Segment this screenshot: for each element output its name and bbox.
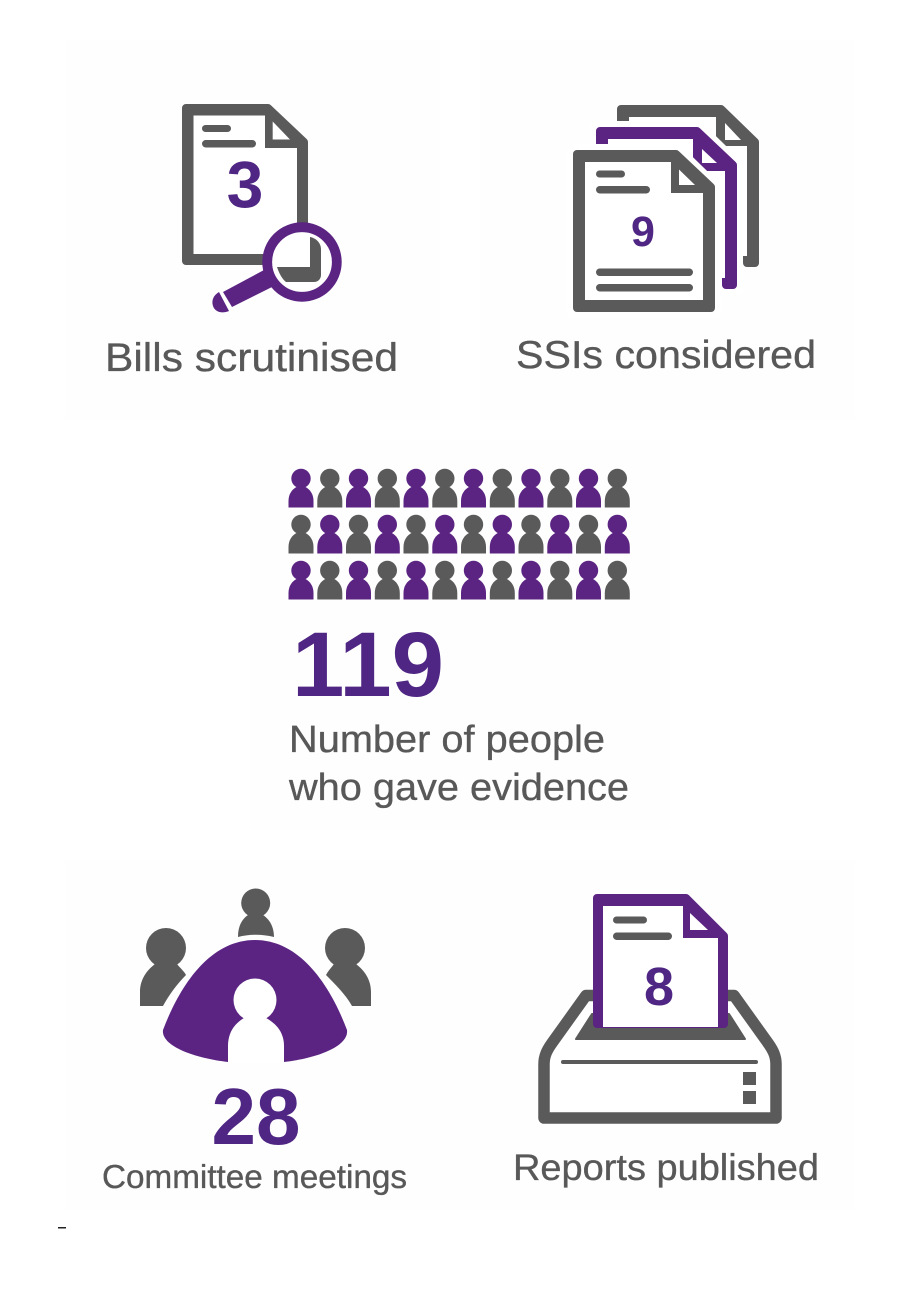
icon: document with magnifying glass xyxy=(186,108,337,312)
label: number of people who gave evidence: Number of people xyxy=(289,719,605,761)
number: 9: 9 xyxy=(631,208,655,256)
icon: people around a table xyxy=(140,888,371,1063)
label: number of people who gave evidence: who gave evidence xyxy=(288,767,629,809)
number: 8: 8 xyxy=(644,957,674,1017)
icon: grid of people xyxy=(288,469,630,600)
icon: stack of documents xyxy=(573,109,755,312)
label: reports published: Reports published xyxy=(513,1147,819,1188)
number: 3: 3 xyxy=(227,148,263,222)
panel: SSIs considered xyxy=(516,109,816,377)
panel: reports published xyxy=(513,898,819,1188)
panel: bills scrutinised xyxy=(105,108,398,380)
panel: people who gave evidence xyxy=(288,469,630,809)
icon: printer with report xyxy=(544,898,776,1118)
number: 119: 119 xyxy=(292,614,444,716)
label: SSIs considered: SSIs considered xyxy=(516,334,816,377)
label: bills scrutinised: Bills scrutinised xyxy=(105,336,398,380)
panel: committee meetings xyxy=(102,888,407,1195)
infographic xyxy=(58,104,817,1228)
label: committee meetings: Committee meetings xyxy=(102,1158,407,1195)
number: 28: 28 xyxy=(212,1072,300,1161)
